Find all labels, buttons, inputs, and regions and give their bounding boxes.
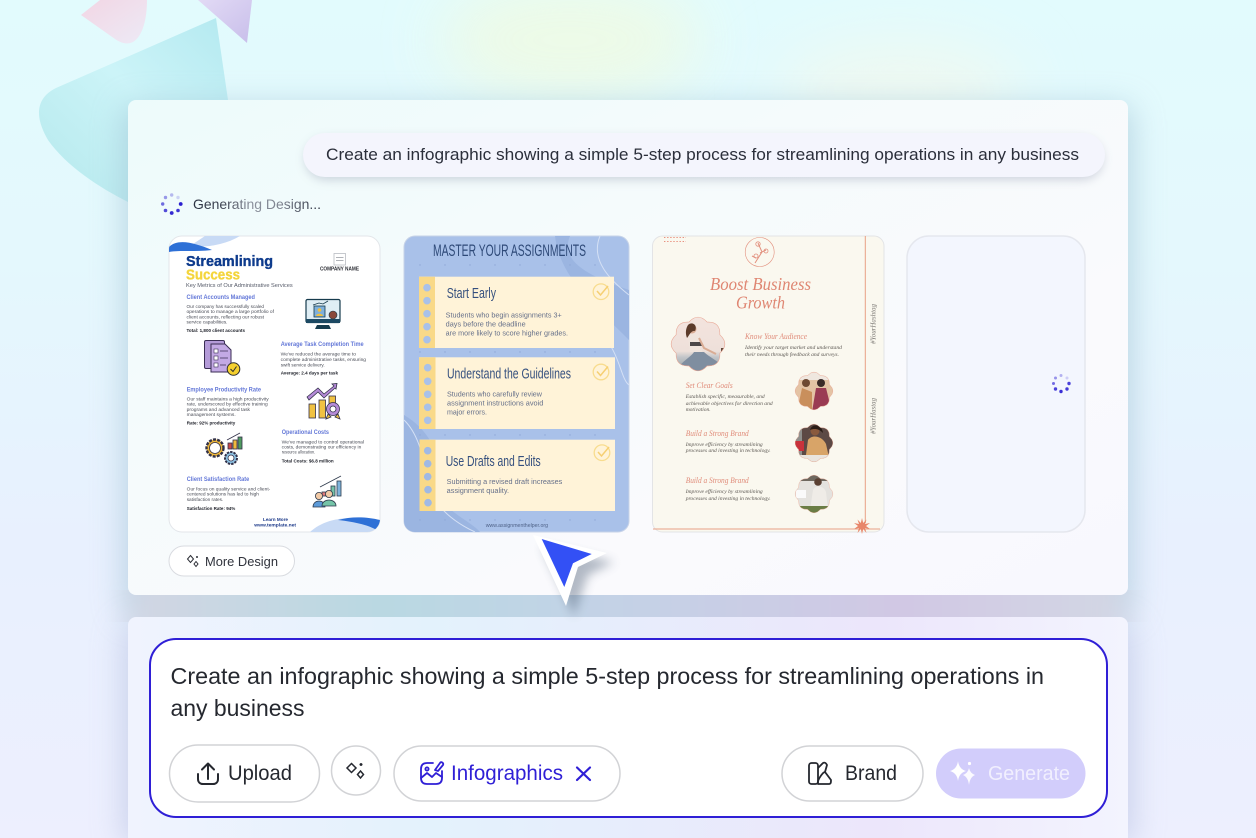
shape: teal cone: [39, 18, 228, 202]
status text: Generating Design...: [193, 196, 321, 212]
icon: spinner: [161, 193, 183, 215]
step: build a strong brand: [685, 429, 771, 454]
section: task completion: swift service delivery.: [281, 362, 325, 368]
note: start early: [419, 277, 614, 348]
icon: growth chart with badge: [307, 384, 340, 419]
icon: upload: [198, 764, 218, 784]
footer link: [253, 517, 296, 528]
note: start early: days before the deadline: [446, 322, 526, 329]
step: build a strong brand repeat: Build a Strong Brand: [686, 476, 750, 485]
section: client satisfaction: satisfaction rates.: [187, 497, 223, 503]
heading: Boost Business: [710, 274, 811, 294]
card: loading placeholder: [907, 236, 1085, 532]
footer link: Learn More: [263, 517, 288, 523]
step: set clear goals: [685, 381, 773, 413]
button: upload: [170, 745, 320, 802]
prompt bubble: [303, 133, 1105, 180]
section: client accounts: [186, 295, 275, 334]
panel: generated designs: [128, 100, 1128, 595]
note: use drafts and edits: Use Drafts and Edits: [446, 453, 541, 470]
button: brand: [782, 746, 923, 801]
step: build a strong brand repeat: Improve efficiency by streamlining: [685, 488, 763, 495]
shape: purple cone: [198, 0, 252, 43]
section: operational costs: costs, demonstrating our efficiency in: [282, 444, 362, 450]
heading: Growth: [736, 293, 785, 313]
hashtag labels: #YourHashtag: [870, 304, 878, 344]
input box: [150, 639, 1107, 817]
card: boost business growth: [652, 236, 884, 534]
photo: woman with plants: [794, 474, 834, 514]
step: build a strong brand: Improve efficiency by streamlining: [685, 441, 763, 448]
heading: [710, 274, 811, 313]
hashtag labels: #YourHastag: [870, 398, 878, 434]
icon: sparkles: [950, 761, 975, 785]
card: master your assignments: [404, 236, 629, 532]
section: client accounts: Client Accounts Managed: [186, 295, 255, 301]
decorative 3D shapes: [39, 0, 252, 202]
step: build a strong brand repeat: [685, 476, 771, 502]
prompt text: any business: [170, 695, 304, 721]
section: employee productivity: [187, 387, 269, 427]
step: build a strong brand repeat: processes and investing in technology.: [685, 496, 771, 502]
section: employee productivity: Employee Productivity Rate: [187, 387, 262, 393]
note: use drafts and edits: [420, 440, 615, 511]
panel shadows: [124, 106, 1132, 838]
note: understand the guidelines: assignment instructions avoid: [447, 401, 543, 408]
icon: floral logo: [745, 238, 774, 266]
section: employee productivity: Rate: 92% productivity: [187, 421, 236, 427]
logo block: [320, 254, 360, 273]
logo block: COMPANY NAME: [320, 267, 360, 273]
prompt text: Create an infographic showing a simple 5-step process for streamlining operations in: [170, 663, 1044, 689]
section: client accounts: Our company has successfully scaled: [186, 304, 264, 310]
button: generate: Generate: [988, 763, 1070, 785]
loading status: [161, 193, 321, 215]
icon: image edit: [421, 762, 443, 784]
button: more design: More Design: [205, 554, 278, 569]
step: set clear goals: achievable objectives for direction and: [686, 400, 773, 407]
step: build a strong brand: processes and investing in technology.: [685, 448, 771, 454]
button: infographics tag: Infographics: [451, 762, 563, 785]
decorative dots: [664, 238, 686, 242]
prompt text: [170, 663, 1044, 721]
step: know your audience: Know Your Audience: [744, 332, 807, 341]
title: MASTER YOUR ASSIGNMENTS: [433, 242, 586, 260]
section: task completion: [281, 342, 366, 377]
card: streamlining success: Key Metrics of Our Administrative Services: [186, 283, 293, 289]
icon: starburst: [854, 518, 870, 534]
section: operational costs: resource allocation.: [282, 450, 315, 456]
footer link: www.template.net: [253, 522, 296, 528]
note: understand the guidelines: [419, 357, 615, 429]
section: client satisfaction: Client Satisfaction Rate: [187, 477, 250, 483]
step: set clear goals: Establish specific, measurable, and: [685, 393, 765, 400]
step: know your audience: Identify your target market and understand: [744, 344, 842, 351]
icon: monitor: [306, 300, 340, 329]
section: operational costs: [282, 430, 364, 465]
section: client satisfaction: Satisfaction Rate: 94%: [187, 506, 236, 512]
icon: spinner: [1052, 374, 1071, 393]
heading: [186, 254, 273, 284]
photo: meditation: [670, 316, 726, 372]
panel: prompt input: [128, 617, 1128, 838]
heading: Streamlining: [186, 254, 273, 270]
button: upload: Upload: [228, 762, 292, 785]
section: client accounts: service capabilities.: [186, 320, 228, 326]
step: set clear goals: Set Clear Goals: [686, 381, 733, 390]
section: task completion: complete administrative tasks, ensuring: [281, 357, 366, 363]
heading: Success: [186, 268, 240, 284]
section: employee productivity: Our staff maintains a high productivity: [187, 397, 269, 403]
photo: two women: [794, 372, 834, 410]
icon: close: [577, 768, 590, 780]
section: client satisfaction: [187, 477, 271, 512]
button: brand: Brand: [845, 762, 897, 785]
section: employee productivity: programs and advanced task: [187, 407, 251, 413]
section: client accounts: Total: 1,800 client accounts: [186, 328, 245, 334]
footer url: www.assignmenthelper.org: [485, 523, 548, 529]
step: build a strong brand: Build a Strong Brand: [686, 429, 750, 438]
step: know your audience: their needs through feedback and surveys.: [745, 351, 839, 358]
section: task completion: Average Task Completion Time: [281, 342, 364, 348]
section: task completion: Average: 2.4 days per task: [281, 371, 338, 377]
note: use drafts and edits: Submitting a revised draft increases: [447, 479, 563, 486]
hashtag labels: [870, 304, 878, 434]
button: infographics tag: [394, 746, 620, 801]
icon: team growth: [313, 476, 341, 507]
shape: pink cone: [81, 0, 147, 43]
icon: gears with bars: [206, 433, 242, 464]
button: generate: [936, 748, 1086, 798]
step: set clear goals: motivation.: [686, 407, 711, 413]
note: understand the guidelines: major errors.: [447, 410, 487, 417]
section: task completion: We've reduced the average time to: [281, 352, 356, 358]
button: magic sparkles: [332, 746, 380, 795]
note: understand the guidelines: Understand the Guidelines: [447, 365, 571, 382]
section: client accounts: client accounts, reflecting our robust: [186, 314, 265, 320]
section: employee productivity: rate, underscored by effective training: [187, 402, 268, 408]
prompt bubble: Create an infographic showing a simple 5-step process for streamlining operations in any business: [326, 146, 1079, 164]
section: operational costs: Operational Costs: [282, 430, 330, 436]
icon: checklist documents: [204, 340, 240, 375]
cursor arrow: [533, 535, 614, 616]
card: streamlining success: [169, 236, 380, 532]
note: start early: Start Early: [447, 285, 496, 302]
section: operational costs: We've managed to control operational: [282, 439, 364, 445]
icon: palette: [809, 763, 831, 784]
note: start early: Students who begin assignments 3+: [446, 313, 562, 320]
section: client satisfaction: Our focus on quality service and client-: [187, 487, 271, 493]
icon: sparkles: [188, 556, 198, 566]
section: employee productivity: management systems.: [187, 412, 236, 418]
note: start early: are more likely to score higher grades.: [446, 331, 568, 338]
note: use drafts and edits: assignment quality.: [447, 488, 509, 495]
section: client satisfaction: centered solutions has led to high: [187, 492, 259, 498]
step: know your audience: [744, 332, 842, 358]
photo: woman at kitchen: [794, 424, 834, 462]
button: more design: [169, 546, 294, 576]
section: client accounts: operations to manage a large portfolio of: [186, 309, 275, 315]
note: understand the guidelines: Students who carefully review: [447, 392, 543, 399]
section: operational costs: Total Costs: $6.8 million: [282, 459, 334, 465]
